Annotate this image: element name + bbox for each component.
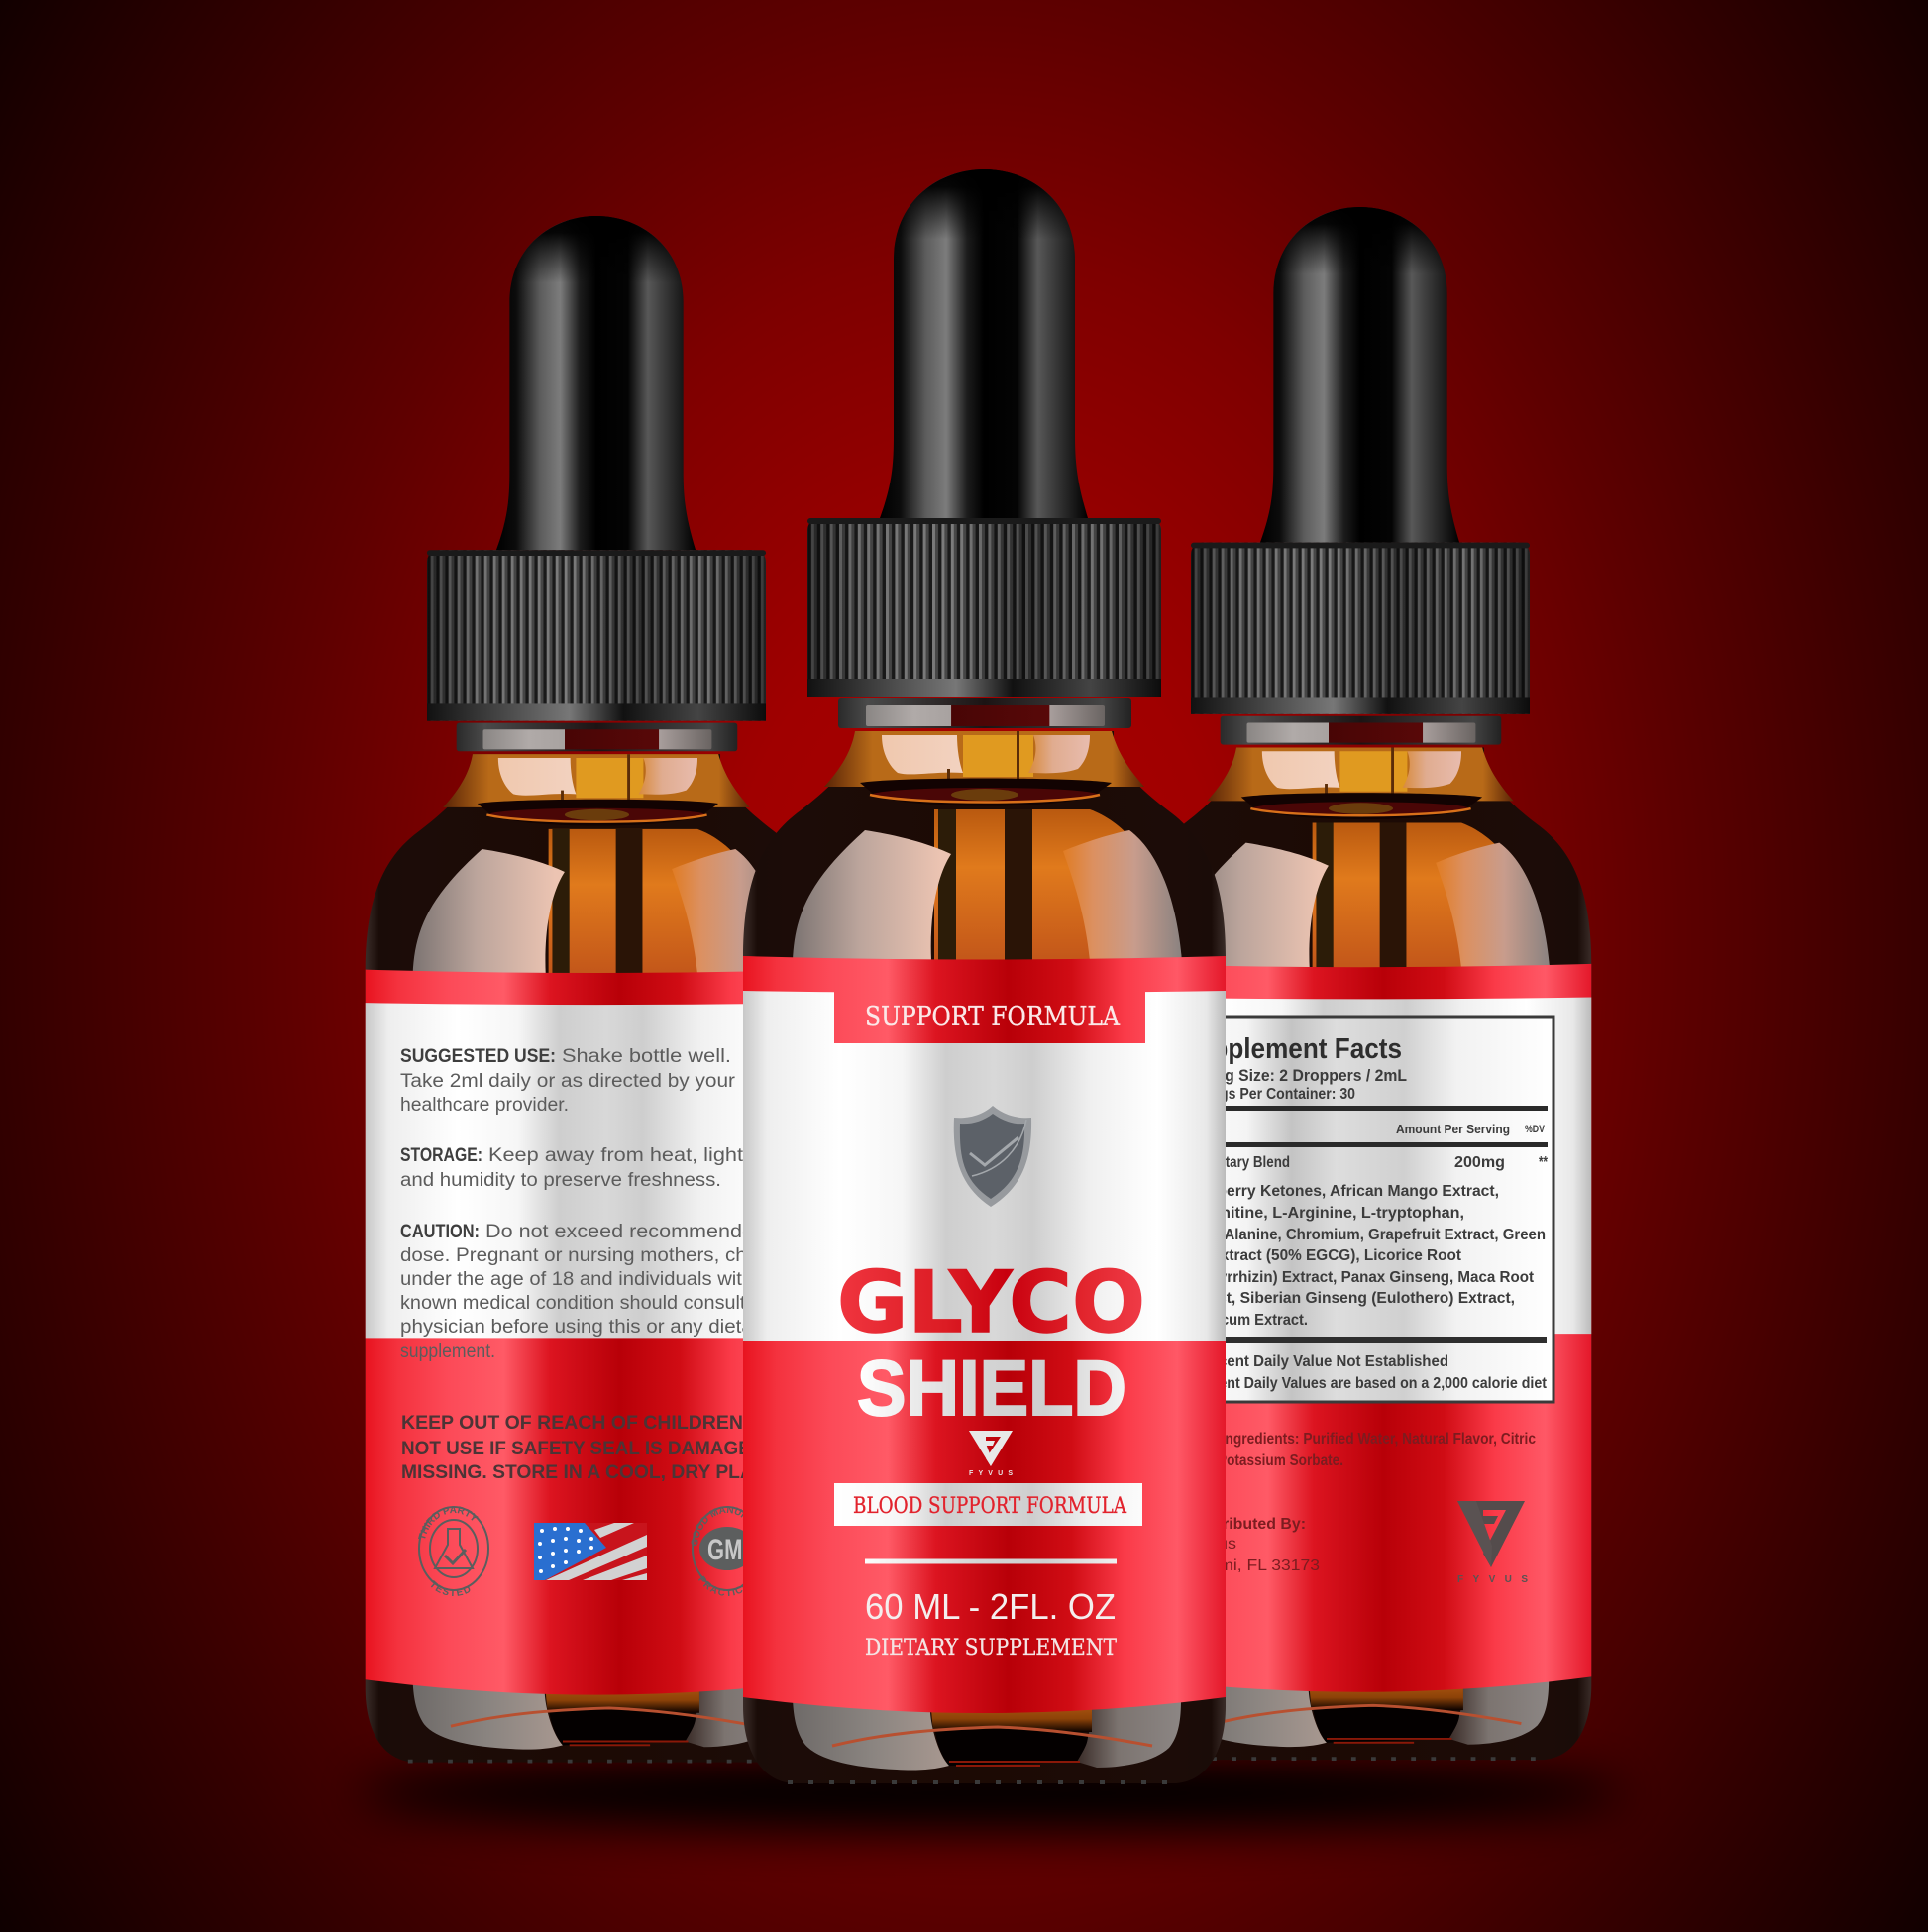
icon: american flag [534, 1523, 647, 1580]
collar [838, 698, 1131, 728]
liquid surface [860, 779, 1112, 806]
badge: third party tested: TESTED [431, 1580, 470, 1596]
glass body [743, 731, 1226, 1783]
suggested use text [400, 1046, 736, 1116]
distributor text: Fyvus [1189, 1536, 1236, 1553]
supplement facts panel: * Percent Daily Values are based on a 2,000 calorie diet [1179, 1375, 1548, 1392]
badge: GMP [692, 1506, 757, 1596]
suggested use text: Shake bottle well. [562, 1046, 731, 1067]
blood support formula box [834, 1483, 1142, 1526]
other ingredients text: Acid, Potassium Sorbate. [1181, 1452, 1343, 1469]
supplement facts panel: Capsicum Extract. [1181, 1312, 1308, 1329]
base glass [788, 1699, 1181, 1782]
warning text: NOT USE IF SAFETY SEAL IS DAMAGED OR [401, 1439, 798, 1459]
bottle: left, back label [365, 216, 798, 1764]
suggested use text: Take 2ml daily or as directed by your [400, 1071, 736, 1092]
distributor text [1189, 1516, 1320, 1574]
volume text: 60 ML - 2FL. OZ [865, 1586, 1116, 1627]
neck glass [824, 731, 1144, 787]
blood support formula box: BLOOD SUPPORT FORMULA [853, 1494, 1127, 1519]
center bottle artwork [743, 169, 1226, 1783]
badge: GMP: PRACTICE [698, 1575, 743, 1596]
title: GLYCO: GLYCO [837, 1253, 1145, 1352]
badge: third party tested [418, 1506, 489, 1596]
caution text: under the age of 18 and individuals with a [400, 1269, 770, 1290]
storage text: STORAGE: [400, 1145, 482, 1166]
other ingredients text [1181, 1431, 1536, 1469]
supplement facts panel: Amount Per Serving [1396, 1122, 1510, 1136]
logo: fyvus light [969, 1431, 1013, 1477]
supplement facts panel: Serving Size: 2 Droppers / 2mL [1177, 1066, 1407, 1085]
support formula tab: SUPPORT FORMULA [865, 1002, 1120, 1032]
supplement facts panel [1169, 1017, 1553, 1402]
caution text: supplement. [400, 1342, 495, 1362]
storage text: Keep away from heat, light [488, 1145, 744, 1166]
left bottle artwork [366, 216, 827, 1763]
caution text: CAUTION: [400, 1222, 480, 1242]
logo: fyvus dark: FYVUS [1457, 1574, 1528, 1585]
supplement facts panel: %DV [1525, 1124, 1546, 1135]
caution text: known medical condition should consult a [400, 1293, 762, 1314]
storage text [400, 1145, 744, 1191]
logo: fyvus dark [1457, 1501, 1528, 1585]
supplement facts panel: 200mg [1454, 1154, 1505, 1171]
title: SHIELD: SHIELD [857, 1343, 1126, 1432]
caution text: physician before using this or any dietary [400, 1317, 771, 1338]
supplement facts panel: Tea Extract (50% EGCG), Licorice Root [1181, 1247, 1462, 1264]
distributor text: Distributed By: [1193, 1516, 1306, 1533]
badge: GMP: GOOD MANUFACTURING [692, 1506, 743, 1546]
ribbed cap [807, 518, 1161, 697]
glass highlight right [1063, 830, 1182, 961]
warning text: MISSING. STORE IN A COOL, DRY PLACE. [401, 1462, 786, 1483]
caution text: dose. Pregnant or nursing mothers, children [400, 1245, 797, 1266]
caution text: Do not exceed recommended [485, 1222, 766, 1242]
badge: GMP: GMP [707, 1534, 757, 1566]
supplement facts panel: (Glycyrrhizin) Extract, Panax Ginseng, Maca Root [1181, 1269, 1535, 1286]
floor shadow [357, 1754, 1625, 1833]
dropper tube [938, 809, 1032, 961]
supplement facts panel: Proprietary Blend [1179, 1154, 1290, 1171]
support formula tab [834, 991, 1145, 1043]
supplement facts panel: Supplement Facts [1179, 1033, 1402, 1065]
right bottle artwork [1129, 207, 1591, 1760]
logo: fyvus light: FYVUS [969, 1470, 1013, 1477]
supplement facts panel: Extract, Siberian Ginseng (Eulothero) Extract, [1179, 1290, 1515, 1307]
divider line [865, 1559, 1117, 1563]
label red [743, 956, 1226, 1713]
storage text: and humidity to preserve freshness. [400, 1170, 721, 1191]
supplement facts panel: ** Percent Daily Value Not Established [1179, 1353, 1448, 1370]
dropper bulb [880, 169, 1088, 518]
icon: shield [954, 1106, 1031, 1207]
supplement facts panel: ** [1539, 1154, 1549, 1171]
label white band [743, 991, 1226, 1341]
glass highlight left [793, 830, 951, 961]
supplement facts panel: Beta-Alanine, Chromium, Grapefruit Extract, Green [1187, 1227, 1546, 1243]
dietary supplement text: DIETARY SUPPLEMENT [865, 1636, 1117, 1661]
supplement facts panel: L-Carnitine, L-Arginine, L-tryptophan, [1179, 1205, 1464, 1222]
other ingredients text: Other Ingredients: Purified Water, Natural Flavor, Citric [1181, 1431, 1536, 1448]
distributor text: Miami, FL 33173 [1191, 1557, 1320, 1574]
bottle: right, supplement facts [1129, 207, 1591, 1760]
badge: third party tested: THIRD PARTY [418, 1506, 479, 1540]
supplement facts panel: Servings Per Container: 30 [1177, 1086, 1355, 1103]
bottle: center, front label [743, 169, 1226, 1783]
warning text: KEEP OUT OF REACH OF CHILDREN. DO [401, 1413, 783, 1434]
suggested use text: healthcare provider. [400, 1095, 569, 1116]
suggested use text: SUGGESTED USE: [400, 1046, 556, 1067]
amber liquid [934, 809, 1182, 961]
caution text [400, 1222, 797, 1362]
supplement facts panel: Raspberry Ketones, African Mango Extract, [1179, 1183, 1499, 1200]
warning text [401, 1413, 798, 1483]
